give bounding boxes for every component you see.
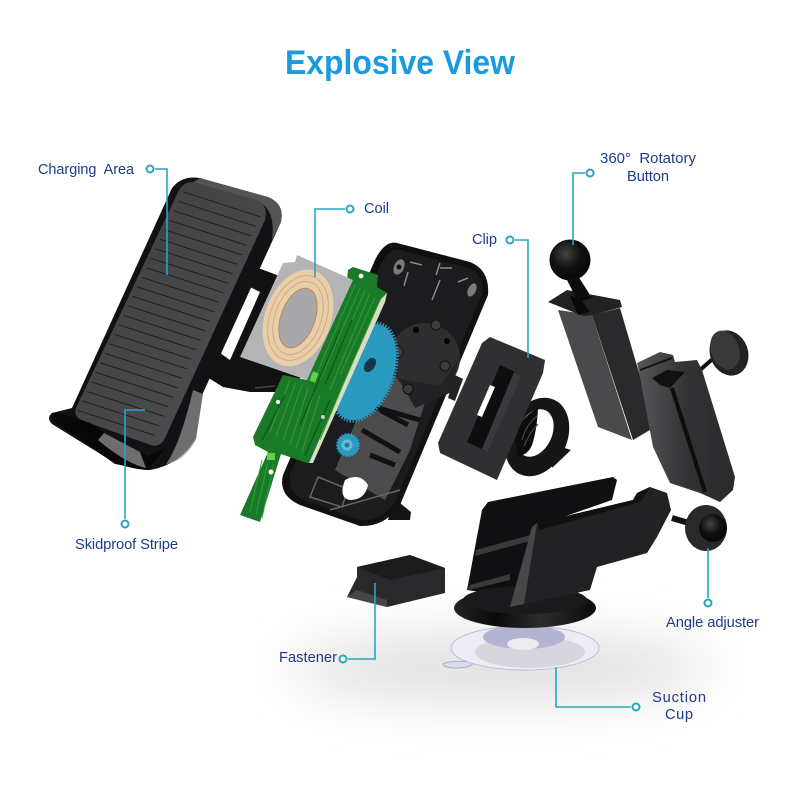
callout: angle adjuster — [666, 548, 759, 631]
part: rear bracket behind pad — [207, 265, 300, 392]
callout: skidproof stripe: Skidproof Stripe — [75, 537, 178, 553]
floor shadow — [290, 636, 710, 700]
part: circuit board — [240, 267, 387, 522]
callout: charging area — [38, 162, 167, 275]
callout: skidproof stripe — [75, 410, 178, 553]
callout: fastener: Fastener — [279, 650, 337, 666]
part: angle adjuster knob — [672, 505, 727, 551]
part: tilt arm with knob — [637, 325, 755, 502]
callout: fastener — [279, 583, 375, 666]
callout: charging area: Charging Area — [38, 162, 135, 178]
part: back housing — [282, 243, 488, 526]
callout: 360 rotatory button: Button — [627, 169, 669, 185]
callout: 360 rotatory button: 360° Rotatory — [600, 151, 697, 167]
disc mount — [390, 323, 460, 393]
housing top bosses — [391, 258, 407, 276]
callout: 360 rotatory button — [573, 151, 697, 245]
part: ball joint stem — [548, 240, 655, 440]
callout: coil — [315, 201, 389, 277]
part: fastener — [347, 555, 445, 607]
part: wireless charging coil on plate — [240, 255, 353, 380]
callout: clip: Clip — [472, 232, 497, 248]
callout: suction cup: Cup — [665, 707, 693, 723]
skidproof ribs — [73, 192, 260, 445]
part: charging pad with skidproof stripes — [49, 177, 282, 470]
exploded view diagram — [38, 49, 759, 722]
part: clip plate — [438, 337, 545, 480]
callout: coil: Coil — [364, 201, 389, 217]
part: suction cup — [443, 625, 599, 670]
part: threaded ring — [492, 387, 582, 487]
callout: suction cup: Suction — [652, 690, 706, 706]
part: blue gears — [318, 314, 410, 456]
callout: clip — [472, 232, 528, 358]
callout: suction cup — [556, 667, 706, 723]
part: suction base and telescopic arm — [454, 477, 671, 628]
title: Explosive View — [285, 44, 516, 82]
callout: angle adjuster: Angle adjuster — [666, 615, 759, 631]
